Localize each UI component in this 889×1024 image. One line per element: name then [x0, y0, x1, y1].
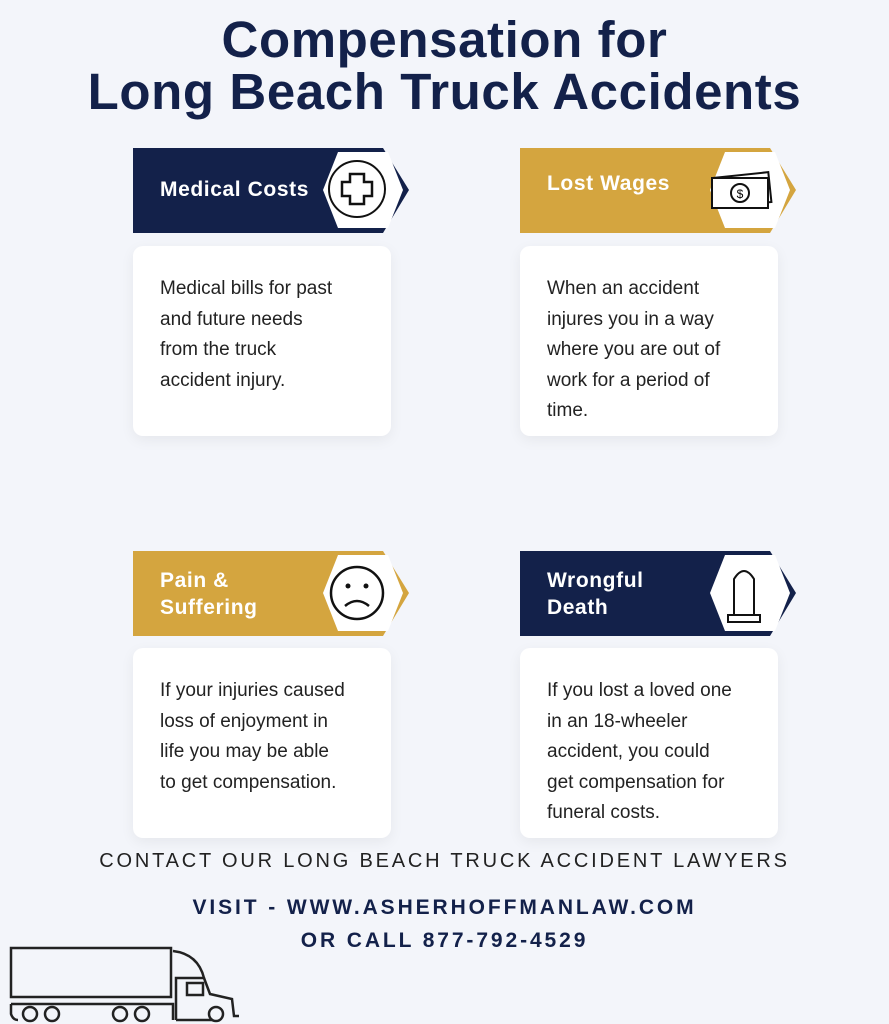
- card text: medical: Medical bills for past: [160, 278, 332, 299]
- card text: lost wages: When an accident: [547, 278, 699, 299]
- card text: lost wages: where you are out of: [547, 339, 720, 360]
- banner: lost wages: $: [737, 187, 744, 201]
- footer contact heading: CONTACT OUR LONG BEACH TRUCK ACCIDENT LAWYERS: [99, 850, 790, 872]
- card text: lost wages: injures you in a way: [547, 308, 714, 330]
- footer visit / call: [192, 896, 697, 952]
- card text: pain: If your injuries caused: [160, 680, 345, 701]
- card text: pain: to get compensation.: [160, 772, 336, 792]
- card text: lost wages: time.: [547, 400, 588, 421]
- icon: truck: [10, 946, 239, 1022]
- title: [88, 11, 801, 120]
- panel: medical costs: [133, 148, 409, 438]
- card text: pain: loss of enjoyment in: [160, 710, 328, 732]
- banner: pain: Suffering: [160, 596, 258, 619]
- card text: pain: [133, 648, 391, 838]
- banner: medical costs: [133, 148, 409, 233]
- card text: medical: [133, 246, 391, 436]
- panel: pain and suffering: [133, 551, 409, 840]
- title: Compensation for: [222, 11, 667, 68]
- footer visit / call: OR CALL 877-792-4529: [301, 929, 588, 952]
- card text: pain: life you may be able: [160, 741, 329, 762]
- banner: pain: [133, 551, 409, 636]
- card text: wrongful death: in an 18-wheeler: [547, 710, 687, 732]
- card text: medical: and future needs: [160, 308, 303, 330]
- card text: lost wages: [520, 246, 778, 436]
- card text: lost wages: work for a period of: [547, 370, 710, 390]
- title: Long Beach Truck Accidents: [88, 63, 801, 120]
- panel: lost wages: [520, 148, 796, 438]
- panel: wrongful death: [520, 551, 796, 840]
- banner: lost wages: [520, 148, 796, 233]
- banner: wrongful death: [520, 551, 796, 636]
- banner: wrongful death: Wrongful: [547, 569, 644, 592]
- card text: wrongful death: If you lost a loved one: [547, 680, 732, 701]
- banner: pain: Pain &: [160, 569, 229, 592]
- card text: medical: accident injury.: [160, 370, 285, 390]
- card text: wrongful death: [520, 648, 778, 838]
- footer visit / call: VISIT - WWW.ASHERHOFFMANLAW.COM: [192, 896, 697, 919]
- banner: wrongful death: Death: [547, 596, 608, 619]
- card text: wrongful death: funeral costs.: [547, 802, 660, 823]
- card text: wrongful death: accident, you could: [547, 741, 710, 762]
- banner: medical costs: Medical Costs: [160, 178, 309, 201]
- banner: lost wages: Lost Wages: [547, 172, 670, 195]
- card text: medical: from the truck: [160, 339, 276, 360]
- card text: wrongful death: get compensation for: [547, 772, 724, 792]
